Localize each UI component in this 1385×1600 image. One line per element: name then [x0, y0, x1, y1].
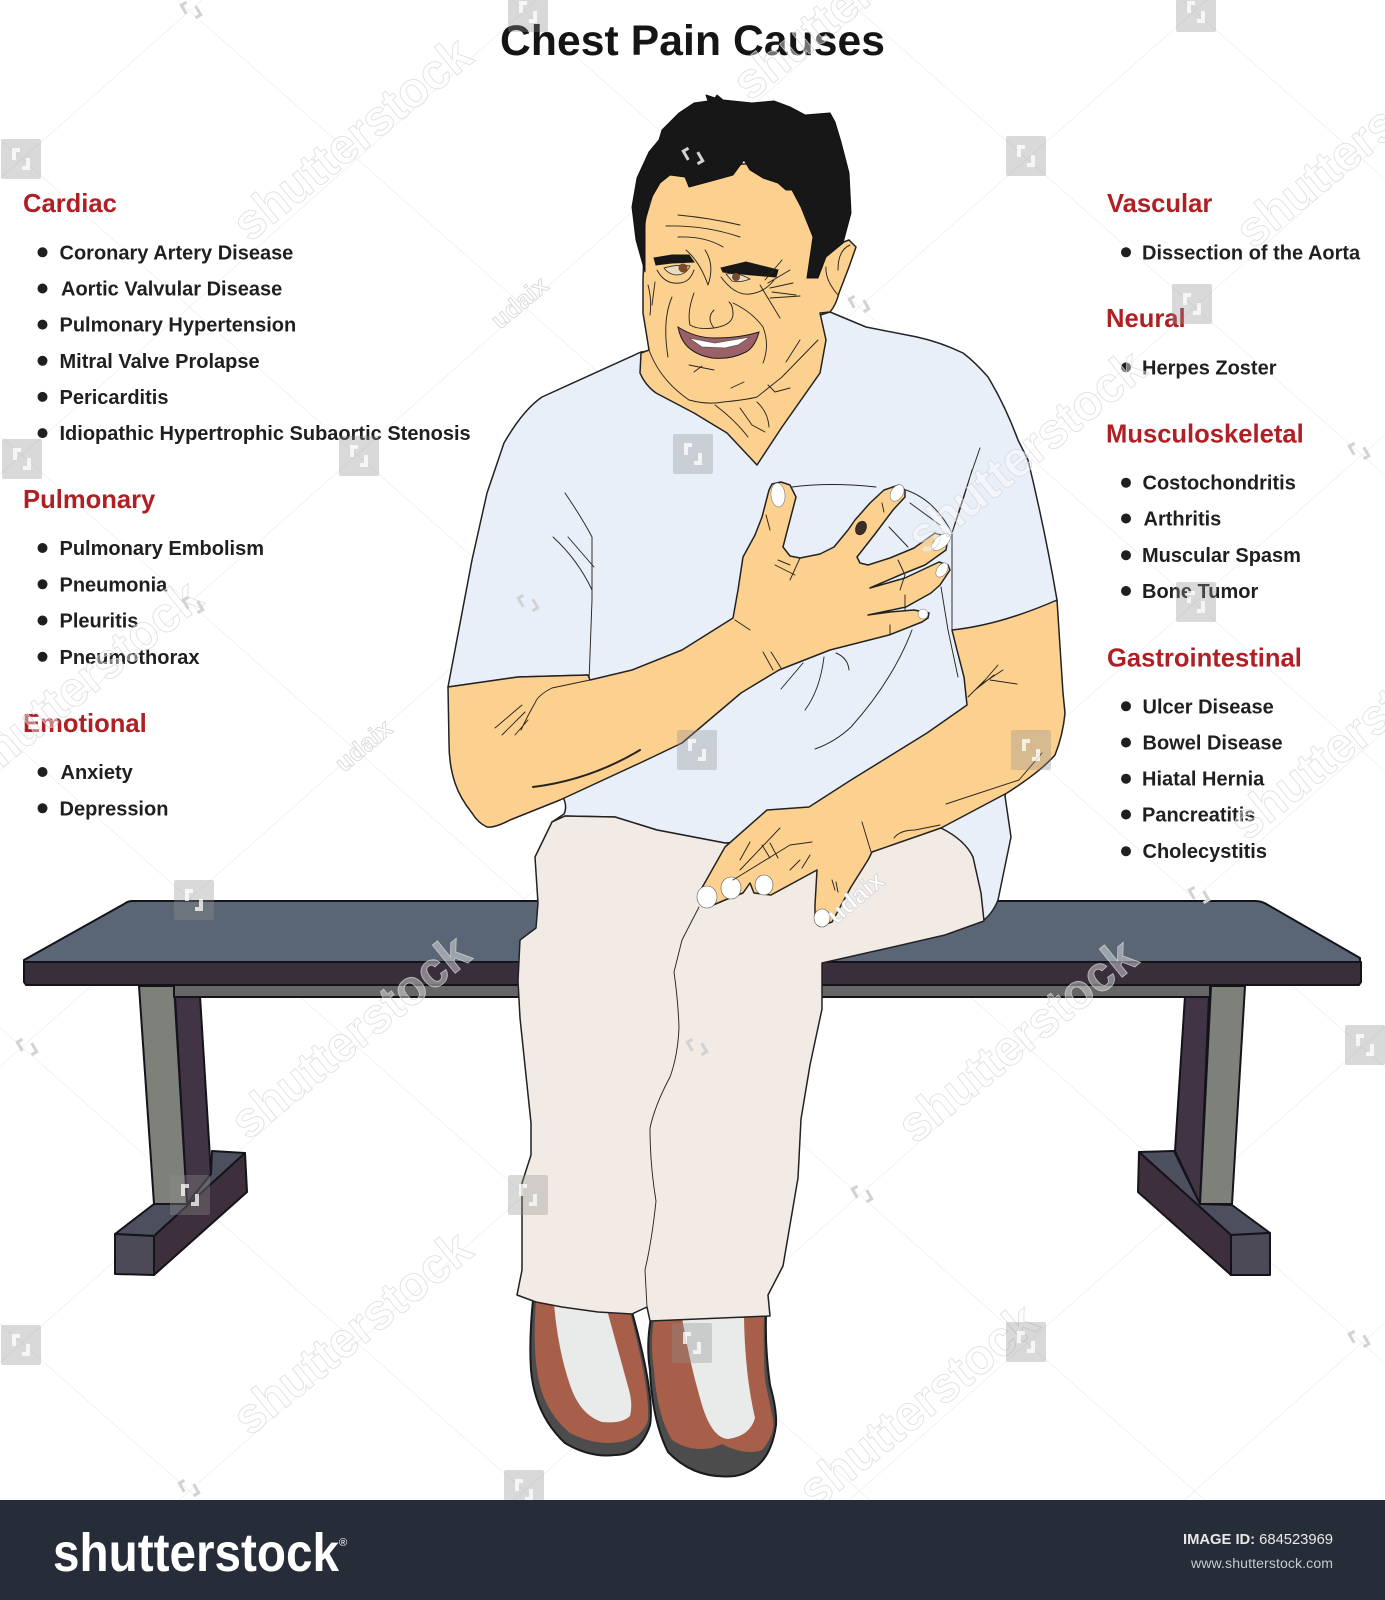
facial lines	[649, 297, 818, 403]
item: Muscular Spasm	[1142, 545, 1301, 567]
panel: neural	[1106, 305, 1277, 379]
panel: pulmonary	[23, 486, 264, 669]
item: Depression	[60, 798, 168, 820]
figure: man with chest pain	[448, 95, 1065, 1476]
bench right leg	[1138, 986, 1270, 1275]
watermarks: shutterstock	[887, 927, 1147, 1154]
panel: musculoskeletal	[1106, 420, 1304, 603]
heading: vascular: Vascular	[1107, 190, 1212, 218]
left eyebrow	[654, 255, 694, 265]
pants inner leg line	[645, 907, 699, 1307]
panel: gastrointestinal	[1107, 644, 1302, 863]
footer image id: IMAGE ID: 684523969	[1183, 1532, 1333, 1548]
item: Pericarditis	[60, 387, 168, 409]
heading: pulmonary: Pulmonary	[23, 486, 156, 514]
nose	[689, 293, 733, 329]
bench seat top	[24, 901, 1360, 963]
item: Pulmonary Hypertension	[60, 315, 296, 337]
ear line	[826, 245, 850, 295]
chest hand creases	[495, 503, 905, 787]
item: Ulcer Disease	[1142, 696, 1274, 718]
item: Anxiety	[60, 762, 134, 784]
left arm and hand on knee	[699, 600, 1065, 925]
item: Herpes Zoster	[1142, 357, 1277, 379]
item: Aortic Valvular Disease	[61, 278, 282, 300]
title: Chest Pain Causes	[500, 17, 885, 65]
chest hand nails	[770, 482, 953, 619]
forehead wrinkles	[666, 215, 740, 285]
heading: musculoskeletal: Musculoskeletal	[1106, 420, 1304, 448]
watermarks: udaix	[330, 714, 398, 778]
footer logo: shutterstock	[53, 1523, 340, 1583]
heading: gastrointestinal: Gastrointestinal	[1107, 644, 1302, 672]
item: Pancreatitis	[1142, 804, 1255, 826]
watermarks: shutterstock	[222, 25, 482, 252]
item: Coronary Artery Disease	[60, 242, 293, 264]
footer registered mark: ®	[339, 1537, 347, 1549]
face details	[648, 215, 850, 437]
left eye	[657, 264, 694, 283]
right shoe	[648, 1316, 776, 1476]
mouth	[678, 327, 759, 358]
hair	[632, 95, 851, 278]
item: Bowel Disease	[1142, 732, 1283, 754]
item: Bone Tumor	[1142, 581, 1259, 603]
item: Arthritis	[1144, 508, 1221, 530]
watermarks: shutterstock	[222, 1219, 482, 1446]
item: Cholecystitis	[1142, 841, 1267, 863]
bench	[24, 901, 1361, 1275]
left shoe	[530, 1300, 651, 1456]
shirt folds	[553, 448, 980, 749]
shirt	[448, 312, 1057, 922]
heading: emotional: Emotional	[23, 710, 147, 738]
watermarks: shutterstock	[220, 923, 480, 1150]
watermarks: shutterstock	[788, 1292, 1048, 1519]
item: Dissection of the Aorta	[1142, 242, 1361, 264]
knee hand creases	[733, 665, 1042, 892]
item: Pneumonia	[60, 574, 168, 596]
item: Costochondritis	[1142, 473, 1296, 495]
item: Idiopathic Hypertrophic Subaortic Stenosis	[60, 423, 471, 445]
bench rail	[174, 985, 1210, 997]
item: Mitral Valve Prolapse	[60, 351, 260, 373]
panel: cardiac	[23, 190, 471, 445]
neck and face	[640, 160, 856, 465]
item: Pneumothorax	[60, 647, 200, 669]
item: Pleuritis	[60, 610, 138, 632]
panel: vascular	[1107, 190, 1361, 264]
pants	[517, 816, 984, 1321]
item: Pulmonary Embolism	[60, 538, 264, 560]
watermarks: udaix	[822, 866, 890, 930]
teeth	[689, 337, 750, 348]
item: Hiatal Hernia	[1142, 769, 1265, 791]
heading: cardiac: Cardiac	[23, 190, 117, 218]
bench seat front	[24, 962, 1361, 985]
footer band	[0, 1500, 1385, 1600]
panel: emotional	[23, 710, 168, 820]
heading: neural: Neural	[1106, 305, 1186, 333]
right eyebrow	[721, 262, 778, 277]
neck lines	[715, 385, 790, 437]
watermarks: shutterstock	[896, 338, 1156, 565]
knee hand nails	[697, 875, 830, 927]
eye wrinkles	[648, 260, 800, 318]
right eye	[721, 273, 774, 294]
footer website: www.shutterstock.com	[1190, 1555, 1333, 1571]
bench left leg	[115, 986, 247, 1275]
right forearm and hand on chest	[448, 482, 950, 827]
watermarks: udaix	[486, 271, 554, 335]
